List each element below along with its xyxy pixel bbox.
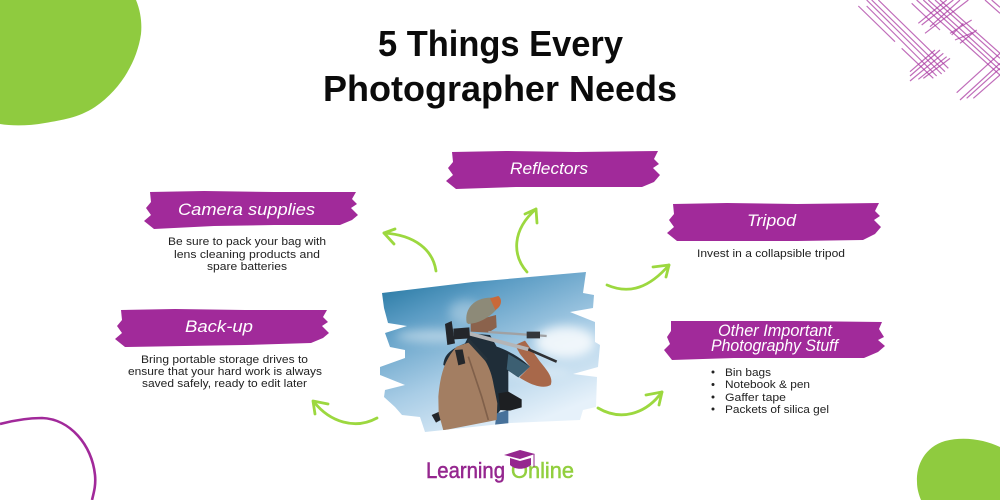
heading: tripod: Tripod xyxy=(747,211,797,230)
title xyxy=(323,23,677,109)
bullet list xyxy=(712,367,829,416)
panel: camera supplies xyxy=(144,191,358,273)
decorative crosshatch: top right xyxy=(858,0,1000,100)
panel: tripod xyxy=(667,203,881,260)
banner: back-up xyxy=(115,309,329,347)
heading: reflectors: Reflectors xyxy=(510,159,589,178)
banner: reflectors xyxy=(446,151,660,189)
banner: camera supplies xyxy=(144,191,358,229)
arrow: to tripod xyxy=(607,265,669,289)
shirt xyxy=(443,333,530,415)
panel: other important photography stuff xyxy=(664,321,885,416)
decorative blob: top left xyxy=(0,0,141,125)
bullet list: Gaffer tape xyxy=(725,392,786,404)
text: back-up: saved safely, ready to edit later xyxy=(142,378,307,390)
text: back-up xyxy=(128,354,323,390)
camera xyxy=(498,392,522,411)
clouds xyxy=(396,300,595,377)
logo: Learning Online xyxy=(426,450,574,483)
text: camera supplies: lens cleaning products and xyxy=(174,249,320,261)
jeans xyxy=(495,410,508,425)
text: tripod: Invest in a collapsible tripod xyxy=(697,248,845,260)
title: 5 Things Every xyxy=(378,23,623,64)
decorative outline curve: bottom left xyxy=(0,418,95,500)
arm xyxy=(515,341,551,387)
bullet list: Notebook & pen xyxy=(725,379,810,391)
heading: other stuff: Other Important xyxy=(718,321,833,340)
banner: tripod xyxy=(667,203,881,241)
logo: Learning Online: Online xyxy=(511,458,574,483)
text: back-up: Bring portable storage drives to xyxy=(141,354,308,366)
arrow: to back-up xyxy=(313,401,377,424)
panel: back-up xyxy=(115,309,329,390)
logo text: Learning xyxy=(426,458,505,483)
banner: other stuff xyxy=(664,321,885,360)
photo: photographer with tripod xyxy=(375,268,605,436)
tripod xyxy=(488,332,547,336)
arrow: to camera supplies xyxy=(384,229,436,271)
icon: graduation cap xyxy=(504,450,535,469)
text: camera supplies xyxy=(168,236,326,273)
heading: other stuff xyxy=(711,321,840,355)
backpack xyxy=(438,343,497,430)
text: back-up: ensure that your hard work is always xyxy=(128,366,323,378)
head and cap xyxy=(471,315,497,333)
arrow: to reflectors xyxy=(517,209,537,272)
decorative blob: bottom right xyxy=(917,439,1000,500)
title: Photographer Needs xyxy=(323,68,677,109)
heading: other stuff: Photography Stuff xyxy=(711,336,840,355)
text: camera supplies: spare batteries xyxy=(207,261,288,273)
heading: camera supplies: Camera supplies xyxy=(178,200,316,219)
panel: reflectors xyxy=(446,151,660,189)
bullet list: Bin bags xyxy=(725,367,772,379)
text: camera supplies: Be sure to pack your bag with xyxy=(168,236,326,248)
bullet list: Packets of silica gel xyxy=(725,404,829,416)
heading: back-up: Back-up xyxy=(185,317,253,336)
arrow: to other stuff xyxy=(598,392,662,415)
